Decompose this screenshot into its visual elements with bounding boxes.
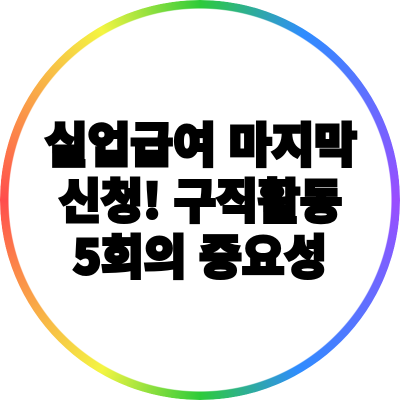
title line 3: 5회의 중요성	[73, 219, 327, 288]
title line 1: 실업급여 마지막	[45, 107, 357, 176]
title line 2: 신청! 구직활동	[59, 163, 342, 232]
